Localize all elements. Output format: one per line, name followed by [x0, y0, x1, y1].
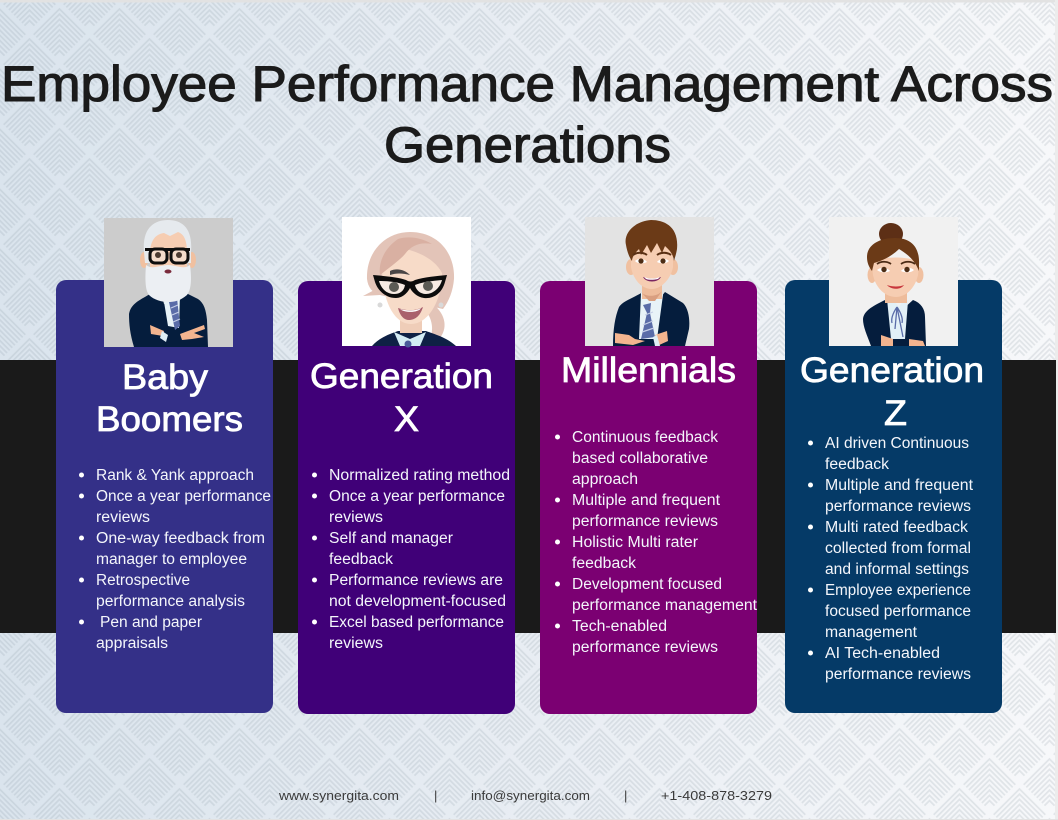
- bullet list: reviews: [329, 635, 383, 652]
- bullet list: collected from formal: [825, 540, 971, 557]
- title: [1, 56, 1053, 173]
- bullet list: feedback: [825, 456, 889, 473]
- heading: Z: [884, 394, 907, 433]
- bullet list: performance reviews: [572, 513, 718, 530]
- footer contact details: www.synergita.com: [278, 788, 399, 803]
- bullet list: AI driven Continuous: [825, 435, 969, 452]
- bullet list: Development focused: [572, 576, 722, 593]
- bullet list: Pen and paper: [100, 614, 202, 631]
- bullet list: feedback: [329, 551, 393, 568]
- panel: Generation X: [298, 217, 515, 714]
- footer contact details: [278, 788, 772, 803]
- bullet list: appraisals: [96, 635, 168, 652]
- heading: Baby: [122, 358, 209, 397]
- bullet list: feedback: [572, 555, 636, 572]
- panel: Generation Z: [785, 217, 1002, 713]
- portrait: young man: [585, 217, 714, 346]
- panel: Millennials: [540, 217, 758, 714]
- bullet list: Multiple and frequent: [825, 477, 974, 494]
- bullet list: focused performance: [825, 603, 971, 620]
- bullet list: based collaborative: [572, 450, 708, 467]
- bullet list: Rank & Yank approach: [96, 467, 254, 484]
- bullet list: performance analysis: [96, 593, 245, 610]
- bullet list: Normalized rating method: [329, 467, 510, 484]
- card background: [56, 280, 273, 713]
- bullet list: [79, 467, 271, 652]
- bullet list: Once a year performance: [96, 488, 271, 505]
- bullet list: performance reviews: [825, 498, 971, 515]
- footer contact details: +1-408-878-3279: [661, 788, 772, 803]
- bullet list: management: [825, 624, 918, 641]
- heading: Generation: [310, 357, 493, 396]
- bullet list: Employee experience: [825, 582, 971, 599]
- bullet list: Multiple and frequent: [572, 492, 721, 509]
- card background: [298, 281, 515, 714]
- title: Employee Performance Management Across: [1, 56, 1053, 112]
- dark horizontal band: [0, 360, 1056, 633]
- heading: [800, 351, 984, 433]
- heading: [96, 358, 243, 439]
- bullet list: Performance reviews are: [329, 572, 503, 589]
- heading: [310, 357, 493, 439]
- bullet list: Multi rated feedback: [825, 519, 968, 536]
- footer contact details: info@synergita.com: [471, 788, 590, 803]
- bullet list: Tech-enabled: [572, 618, 667, 635]
- bullet list: Once a year performance: [329, 488, 505, 505]
- bullet list: Retrospective: [96, 572, 190, 589]
- bullet list: Self and manager: [329, 530, 453, 547]
- footer contact details: |: [624, 788, 627, 803]
- panel: Baby Boomers: [56, 218, 273, 713]
- heading: Millennials: [561, 351, 736, 390]
- card background: [540, 281, 757, 714]
- portrait: woman with glasses: [342, 217, 471, 348]
- card background: [785, 280, 1002, 713]
- bullet list: [312, 467, 510, 652]
- portrait: bearded older man: [104, 218, 233, 347]
- bullet list: and informal settings: [825, 561, 969, 578]
- bullet list: Holistic Multi rater: [572, 534, 698, 551]
- bullet list: not development-focused: [329, 593, 506, 610]
- title: Generations: [384, 117, 671, 173]
- bullet list: performance reviews: [825, 666, 971, 683]
- bullet list: Excel based performance: [329, 614, 504, 631]
- bullet list: performance management: [572, 597, 758, 614]
- heading: Generation: [800, 351, 984, 390]
- footer contact details: |: [434, 788, 437, 803]
- bullet list: reviews: [96, 509, 150, 526]
- bullet list: performance reviews: [572, 639, 718, 656]
- bullet list: One-way feedback from: [96, 530, 265, 547]
- bullet list: approach: [572, 471, 638, 488]
- bullet list: manager to employee: [96, 551, 247, 568]
- bullet list: [555, 429, 758, 656]
- portrait: young woman with hair bun: [829, 217, 958, 346]
- bullet list: Continuous feedback: [572, 429, 718, 446]
- heading: X: [394, 400, 419, 439]
- bullet list: AI Tech-enabled: [825, 645, 940, 662]
- bullet list: reviews: [329, 509, 383, 526]
- heading: Boomers: [96, 400, 243, 439]
- bullet list: [808, 435, 974, 683]
